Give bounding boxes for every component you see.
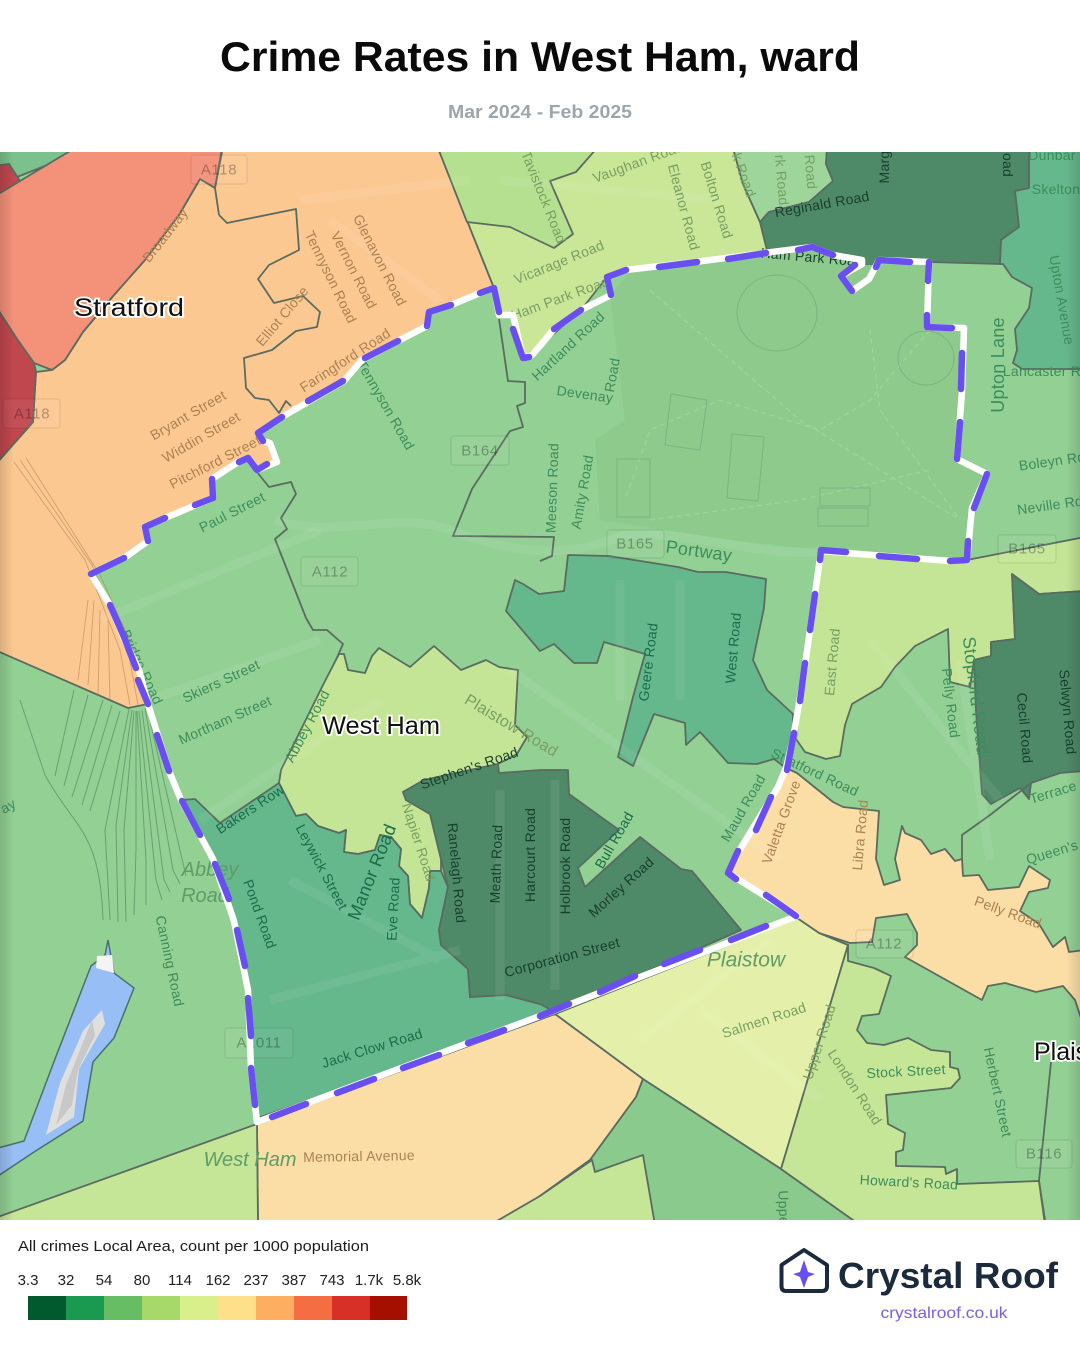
- street labels: yellow wards: Road: [802, 154, 820, 190]
- street labels: green wards: Stock Street: [866, 1061, 946, 1081]
- street labels: green wards: Hartland Road: [528, 308, 608, 384]
- road shields: A118: [201, 162, 237, 178]
- street labels: yellow wards: Napier Road: [399, 801, 439, 883]
- place label: Stratford: Stratford: [74, 294, 184, 322]
- street labels: green wards: Upton Lane: [988, 317, 1008, 413]
- street labels: green wards: Devenay: [556, 382, 614, 406]
- ward: top centre yellow-green: [438, 148, 767, 358]
- legend title: All crimes Local Area, count per 1000 population: [18, 1238, 369, 1255]
- street labels: yellow wards: Vaughan Road: [590, 138, 686, 186]
- ward: north-west green corner: [0, 152, 66, 178]
- street labels: orange wards: Widdin Street: [159, 408, 243, 466]
- road shields: A112: [866, 936, 902, 952]
- boundary: white base line: [91, 247, 987, 1122]
- road shields: B165: [616, 536, 654, 552]
- street labels: yellow wards: Plaistow Road: [461, 692, 561, 760]
- street labels: dark wards: Morley Road: [585, 854, 657, 920]
- legend values: 743: [319, 1272, 345, 1289]
- ward: dark red: [0, 305, 36, 465]
- boundary: purple dashes: [91, 247, 987, 1117]
- street labels: green wards: Dunbar: [1028, 147, 1076, 163]
- street labels: yellow wards: Tavistock Road: [518, 148, 570, 246]
- street labels: green wards: Herbert Street: [981, 1046, 1015, 1138]
- station labels: Plaistow: [707, 948, 787, 972]
- ward: Valetta and Pelly light orange: [728, 768, 1080, 1030]
- street labels: dark wards: Marg: [876, 151, 892, 183]
- ward: salmon high crime: [0, 148, 222, 370]
- street labels: green wards: Terrace: [1028, 777, 1078, 807]
- map base: medium green area: [0, 152, 1080, 1220]
- street labels: green wards: Road: [601, 357, 623, 393]
- street labels: yellow wards: Ham Park Road: [509, 273, 611, 323]
- park: darker green: [610, 265, 976, 546]
- legend values: 5.8k: [393, 1272, 422, 1289]
- street labels: orange wards: Vernon Road: [328, 229, 380, 311]
- legend values: 80: [134, 1272, 150, 1289]
- street labels: medium green wards: [213, 612, 744, 1071]
- street labels: medium green wards: Bull Road: [591, 809, 637, 871]
- legend values: 387: [281, 1272, 307, 1289]
- ward outlines: east strip: [1039, 1062, 1051, 1220]
- ward: Stratford orange: [0, 148, 494, 708]
- street labels: dark wards: Ham Park Road: [760, 245, 864, 269]
- street labels: yellow wards: Vicarage Road: [512, 237, 606, 287]
- street labels: green wards: Howard's Road: [859, 1171, 959, 1193]
- station labels: Road: [181, 885, 230, 907]
- legend values: 32: [58, 1272, 74, 1289]
- street labels: medium green wards: Leywick Street: [293, 822, 351, 912]
- street labels: green wards: Maud Road: [717, 772, 769, 844]
- street labels: yellow wards: London Road: [825, 1046, 885, 1128]
- street labels: orange wards: Memorial Avenue: [303, 1147, 415, 1165]
- ward: West Ham yellow-green: [279, 646, 527, 918]
- street labels: orange wards: Libra Road: [849, 799, 871, 871]
- street labels: medium green wards: Geere Road: [635, 622, 661, 702]
- ward: Plaistow pale yellow: [555, 918, 848, 1169]
- street labels: yellow wards: Upper Road: [799, 1002, 839, 1082]
- street labels: green wards: Upton Avenue: [1046, 254, 1078, 346]
- ward: south centre yellow-green: [490, 1155, 655, 1225]
- legend values: 1.7k: [355, 1272, 384, 1289]
- road shields: B165: [1008, 540, 1046, 558]
- street labels: orange wards: Faringford Road: [297, 325, 393, 395]
- park paths: [625, 290, 960, 520]
- street labels: orange wards: Tennyson Road: [302, 228, 360, 326]
- street labels: green wards: Abbey Road: [281, 687, 333, 765]
- legend values: 54: [96, 1272, 112, 1289]
- street labels: green wards: Stopford Road: [959, 636, 993, 756]
- street labels: dark wards: Stephen's Road: [418, 744, 520, 792]
- ward: centre right medium green: [506, 555, 793, 768]
- street labels: dark wards: [418, 151, 1080, 980]
- ward: bottom left yellow-green: [0, 1124, 258, 1225]
- street labels: green wards: Tennyson Road: [354, 357, 418, 453]
- ward: south centre dark green: [403, 764, 741, 1012]
- street labels: orange wards: Pelly Road: [972, 892, 1044, 932]
- ward: south west medium green: [181, 783, 560, 1118]
- ward outline: north centre: [453, 319, 554, 561]
- street labels: green wards: Bridge Road: [118, 627, 166, 707]
- ward: East Road yellow-green: [796, 537, 1080, 759]
- railway lines in orange ward: [14, 458, 146, 705]
- ward: south orange: [257, 1014, 643, 1225]
- street labels: green wards: Lancaster R: [1003, 363, 1080, 379]
- street labels: green wards: Pelly Road: [939, 667, 963, 739]
- ward outlines: Stratford internal: [219, 209, 320, 413]
- street labels: dark wards: Reginald Road: [773, 188, 871, 220]
- street labels: yellow wards: k Road: [729, 151, 759, 199]
- street labels: dark wards: Selwyn Road: [1056, 669, 1080, 755]
- street labels: green wards: Skelton: [1032, 181, 1080, 197]
- street labels: dark wards: Harcourt Road: [522, 808, 538, 902]
- place label: West Ham: West Ham: [322, 712, 440, 740]
- street labels: dark wards: Meath Road: [487, 824, 505, 904]
- street labels: green wards: Amity Road: [568, 454, 596, 530]
- street labels: green wards: Queen's: [1024, 837, 1080, 867]
- street labels: orange wards: Broadway: [139, 205, 191, 265]
- railway lines in west green area: [20, 690, 186, 922]
- street labels: green wards: Skiers Street: [180, 656, 262, 706]
- street labels: medium green wards: Jack Clow Road: [320, 1025, 424, 1071]
- street labels: orange wards: Pitchford Street: [167, 432, 263, 492]
- street labels: green wards: Portway: [665, 536, 733, 566]
- legend: [18, 1238, 422, 1320]
- water: reservoir: [0, 940, 134, 1176]
- logo wordmark: Crystal Roof: [838, 1255, 1059, 1296]
- ward: top centre light green: [438, 148, 597, 248]
- street labels: dark wards: Holbrook Road: [557, 818, 573, 914]
- street labels: orange wards: Bryant Street: [147, 387, 229, 443]
- ward: Cecil Road dark green: [974, 574, 1080, 804]
- station labels: [181, 859, 787, 1171]
- legend colour scale: [28, 1296, 407, 1320]
- street labels: dark wards: Corporation Street: [503, 934, 621, 980]
- road shields: A1011: [236, 1034, 282, 1052]
- street labels: medium green wards: Eve Road: [383, 877, 403, 941]
- street labels: green wards: Stratford Road: [769, 745, 861, 799]
- street labels: orange wards: Glenavon Road: [350, 212, 410, 308]
- road shields: A112: [312, 564, 348, 580]
- street labels: yellow wards: Eleanor Road: [665, 162, 703, 252]
- West Ham ward boundary: [91, 247, 987, 1122]
- title: Crime Rates in West Ham, ward: [220, 33, 860, 80]
- legend values: [18, 1272, 422, 1289]
- map edge shading: [0, 152, 1080, 1220]
- legend values: 237: [243, 1272, 269, 1289]
- logo: [782, 1250, 1059, 1322]
- street labels: dark wards: Cecil Road: [1014, 692, 1036, 764]
- street labels: yellow wards: Bolton Road: [698, 159, 736, 241]
- street grid tint: [100, 180, 1000, 1100]
- street labels: orange wards: Valetta Grove: [758, 778, 804, 866]
- station labels: West Ham: [204, 1149, 296, 1171]
- legend values: 162: [205, 1272, 231, 1289]
- legend values: 3.3: [18, 1272, 38, 1289]
- ward: Reginald Road dark green: [759, 152, 1028, 265]
- street labels: medium green wards: Bakers Row: [213, 781, 288, 837]
- road shields: A118: [14, 406, 50, 422]
- street labels: medium green wards: West Road: [722, 612, 744, 684]
- legend values: 114: [168, 1272, 192, 1289]
- street labels: green wards: Meeson Road: [542, 443, 562, 533]
- road shields: B164: [461, 442, 499, 460]
- icon: house with star: [782, 1250, 827, 1291]
- street labels: yellow wards: East Road: [821, 628, 843, 696]
- ward: Upper Road yellow-green: [781, 945, 1045, 1225]
- ward: Road area light green: [733, 148, 833, 222]
- street labels: green wards: Canning Road: [153, 914, 187, 1008]
- street labels: yellow wards: rk Road: [772, 154, 792, 206]
- street labels: medium green wards: Pond Road: [240, 877, 280, 951]
- ward outline: west centre: [257, 472, 344, 662]
- road shields: B116: [1026, 1146, 1062, 1162]
- street labels: green wards: Upper: [775, 1190, 793, 1230]
- logo url: crystalroof.co.uk: [880, 1305, 1009, 1322]
- street labels: dark wards: Ranelagh Road: [445, 822, 469, 924]
- street labels: medium green wards: Manor Road: [344, 821, 400, 923]
- street labels: dark wards: oad: [1000, 153, 1016, 177]
- street labels: orange wards: Elliot Close: [252, 283, 312, 349]
- street labels: yellow wards: [399, 138, 885, 1128]
- street labels: green wards: Mortham Street: [176, 692, 274, 748]
- subtitle: date range: Mar 2024 - Feb 2025: [448, 102, 632, 122]
- street labels: yellow wards: Salmen Road: [720, 999, 808, 1041]
- road shields: [3, 155, 1072, 1168]
- street labels: green wards: Paul Street: [196, 489, 268, 535]
- station labels: Abbey: [181, 859, 239, 881]
- ward: south centre green: [536, 1078, 852, 1220]
- ward: Upton Avenue medium green: [1000, 148, 1080, 369]
- street labels: orange wards: [139, 205, 1044, 1165]
